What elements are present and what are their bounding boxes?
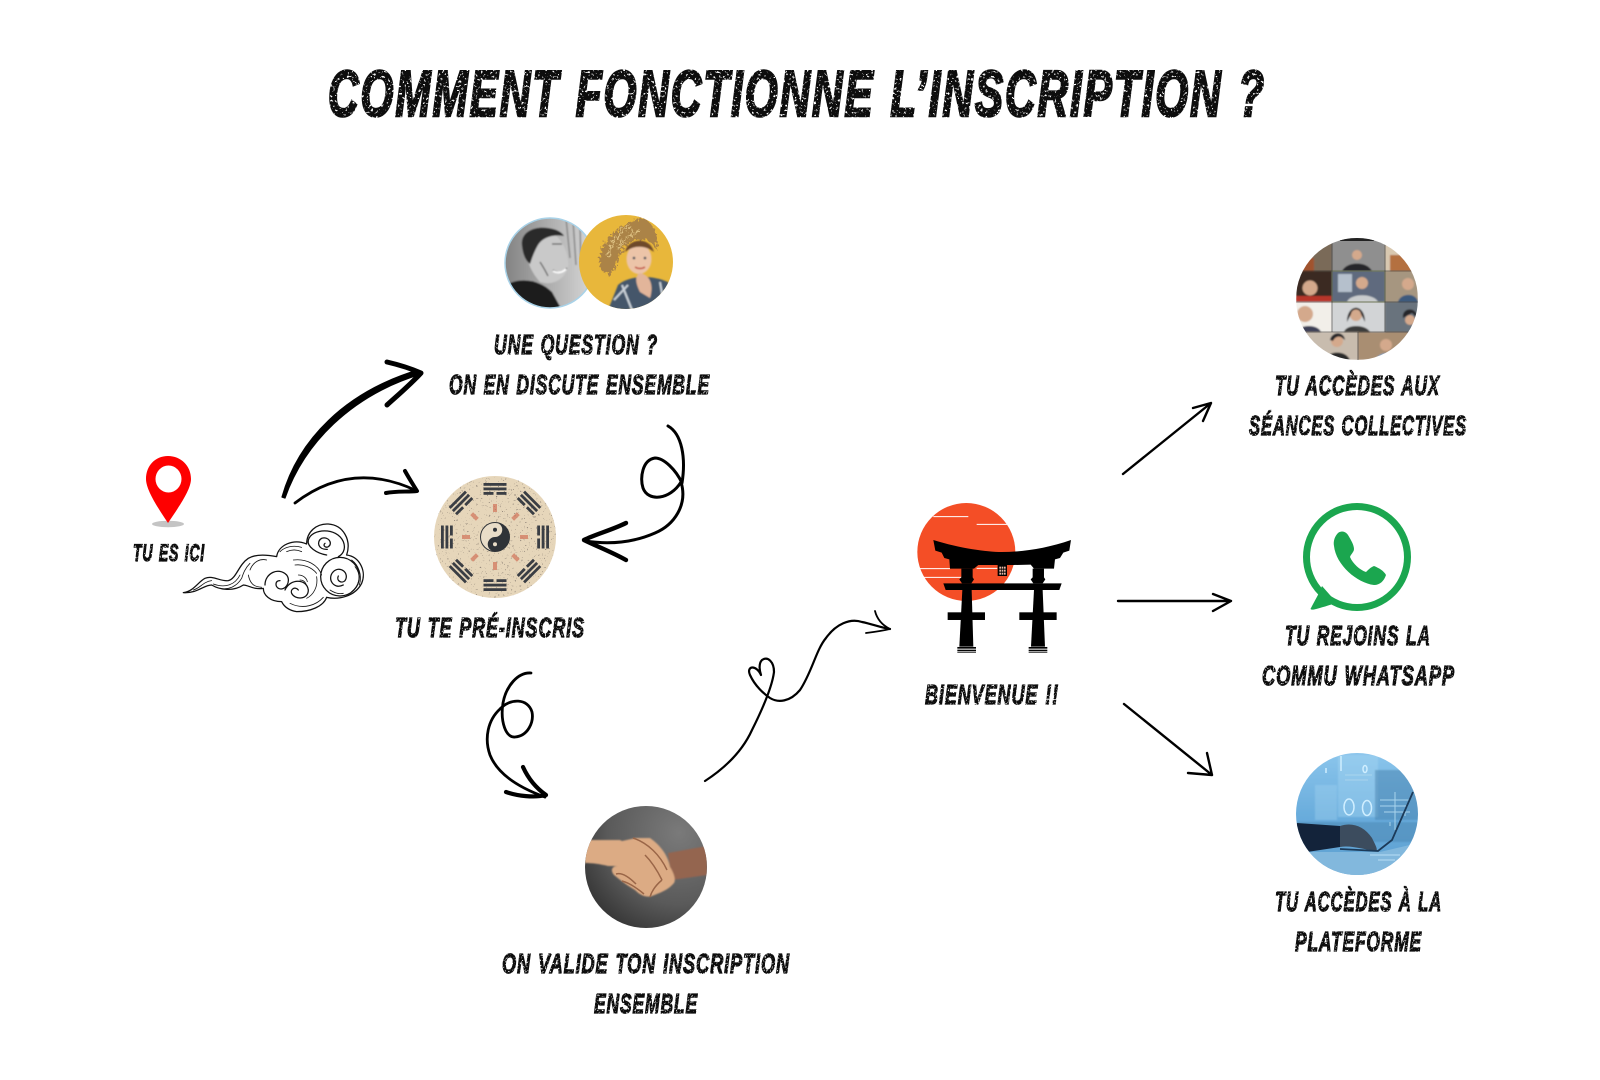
arrow: swirl question to pre-inscription: [584, 426, 683, 560]
label: bienvenue: BIENVENUE !!: [925, 679, 1059, 710]
illustration: torii gate with sun: [917, 503, 1071, 653]
label: plateforme: [1275, 886, 1442, 957]
icon: location pin: [146, 456, 191, 527]
icon: yin yang: [480, 522, 510, 552]
label: validation: ENSEMBLE: [594, 988, 698, 1019]
label: une question: ON EN DISCUTE ENSEMBLE: [449, 369, 710, 400]
label: whatsapp: COMMU WHATSAPP: [1262, 660, 1455, 691]
arrow: swirl pre-inscription to validation: [487, 673, 546, 797]
label: validation: ON VALIDE TON INSCRIPTION: [502, 948, 790, 979]
arrow: pin to question: [282, 362, 421, 498]
arrow: to group sessions: [1123, 403, 1211, 474]
arrow: to whatsapp: [1118, 594, 1231, 611]
label: séances collectives: TU ACCÈDES AUX: [1275, 370, 1441, 401]
step: question avatars: [500, 215, 673, 312]
photo: woman portrait: [579, 215, 673, 310]
icon: cloud: [183, 524, 363, 612]
step: pre-inscription bagua: [434, 476, 556, 598]
label: tu es ici: TU ES ICI: [133, 540, 205, 567]
label: validation: [502, 948, 790, 1019]
label: whatsapp: TU REJOINS LA: [1285, 620, 1431, 651]
label: plateforme: PLATEFORME: [1295, 926, 1422, 957]
label: pré-inscription: TU TE PRÉ-INSCRIS: [395, 612, 585, 643]
arrow: to platform: [1124, 704, 1212, 775]
label: whatsapp: [1262, 620, 1455, 691]
icon: whatsapp: [1306, 506, 1408, 610]
label: une question: [449, 329, 710, 400]
arrow: heart swirl validation to welcome: [705, 611, 890, 781]
photo: man portrait: [506, 218, 586, 308]
label: une question: UNE QUESTION ?: [494, 329, 658, 360]
label: plateforme: TU ACCÈDES À LA: [1275, 886, 1442, 917]
photo: handshake: [585, 806, 707, 928]
photo: video call grid: [1296, 238, 1418, 360]
arrow: pin to pre-inscription: [295, 471, 417, 503]
photo: laptop platform: [1296, 753, 1418, 875]
label: séances collectives: [1249, 370, 1467, 441]
